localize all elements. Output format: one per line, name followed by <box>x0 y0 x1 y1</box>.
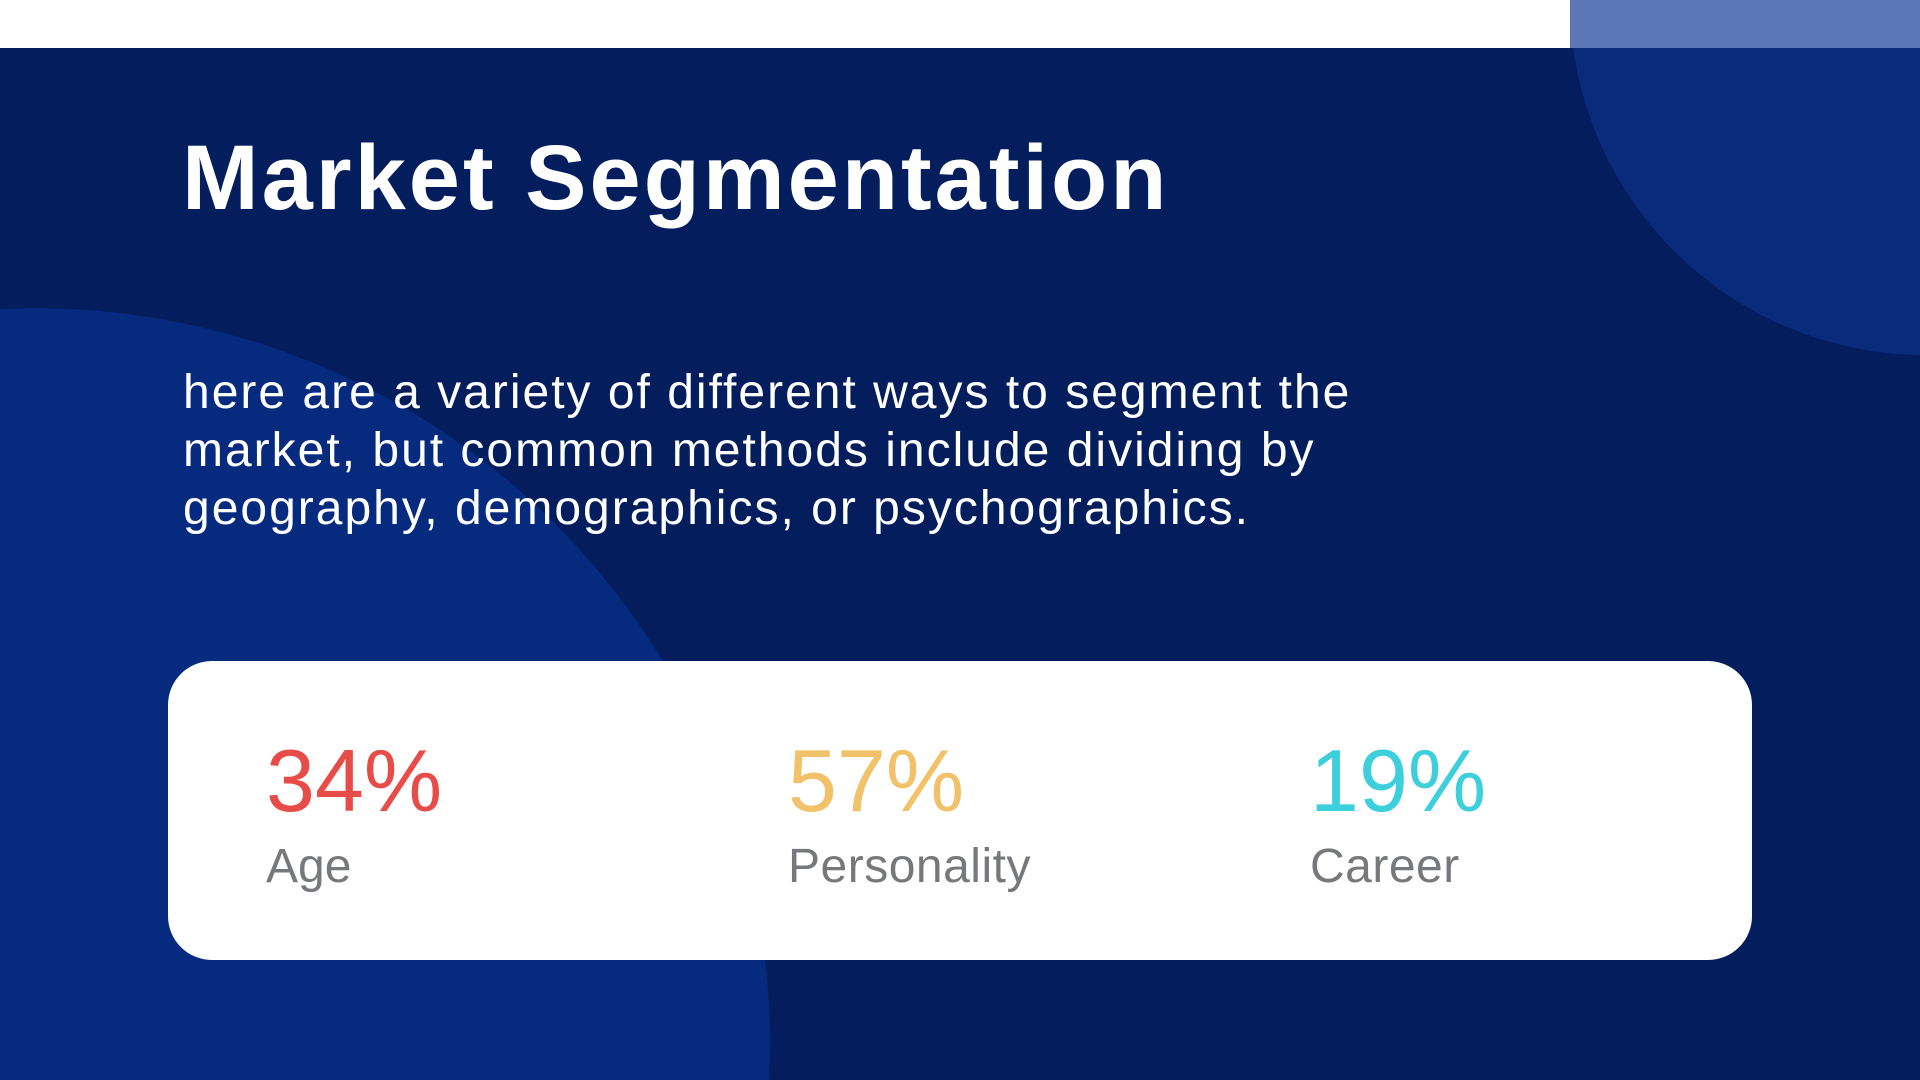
description paragraph <box>183 366 1351 535</box>
stat: age: Age <box>266 840 351 893</box>
stat: personality: Personality <box>788 840 1031 893</box>
stat: personality: 57% <box>788 731 964 830</box>
stat: career: Career <box>1310 840 1460 893</box>
stat: career: 19% <box>1310 731 1486 830</box>
title: Market Segmentation <box>182 127 1169 229</box>
description paragraph: geography, demographics, or psychographics. <box>183 482 1250 535</box>
stat: personality <box>788 731 1031 893</box>
stats card <box>168 661 1752 960</box>
description paragraph: here are a variety of different ways to segment the <box>183 366 1351 419</box>
top white bar <box>0 0 1920 48</box>
top right light bar <box>1570 0 1920 48</box>
stat: age <box>266 731 442 893</box>
description paragraph: market, but common methods include dividing by <box>183 424 1316 477</box>
stat: career <box>1310 731 1486 893</box>
stat: age: 34% <box>266 731 442 830</box>
